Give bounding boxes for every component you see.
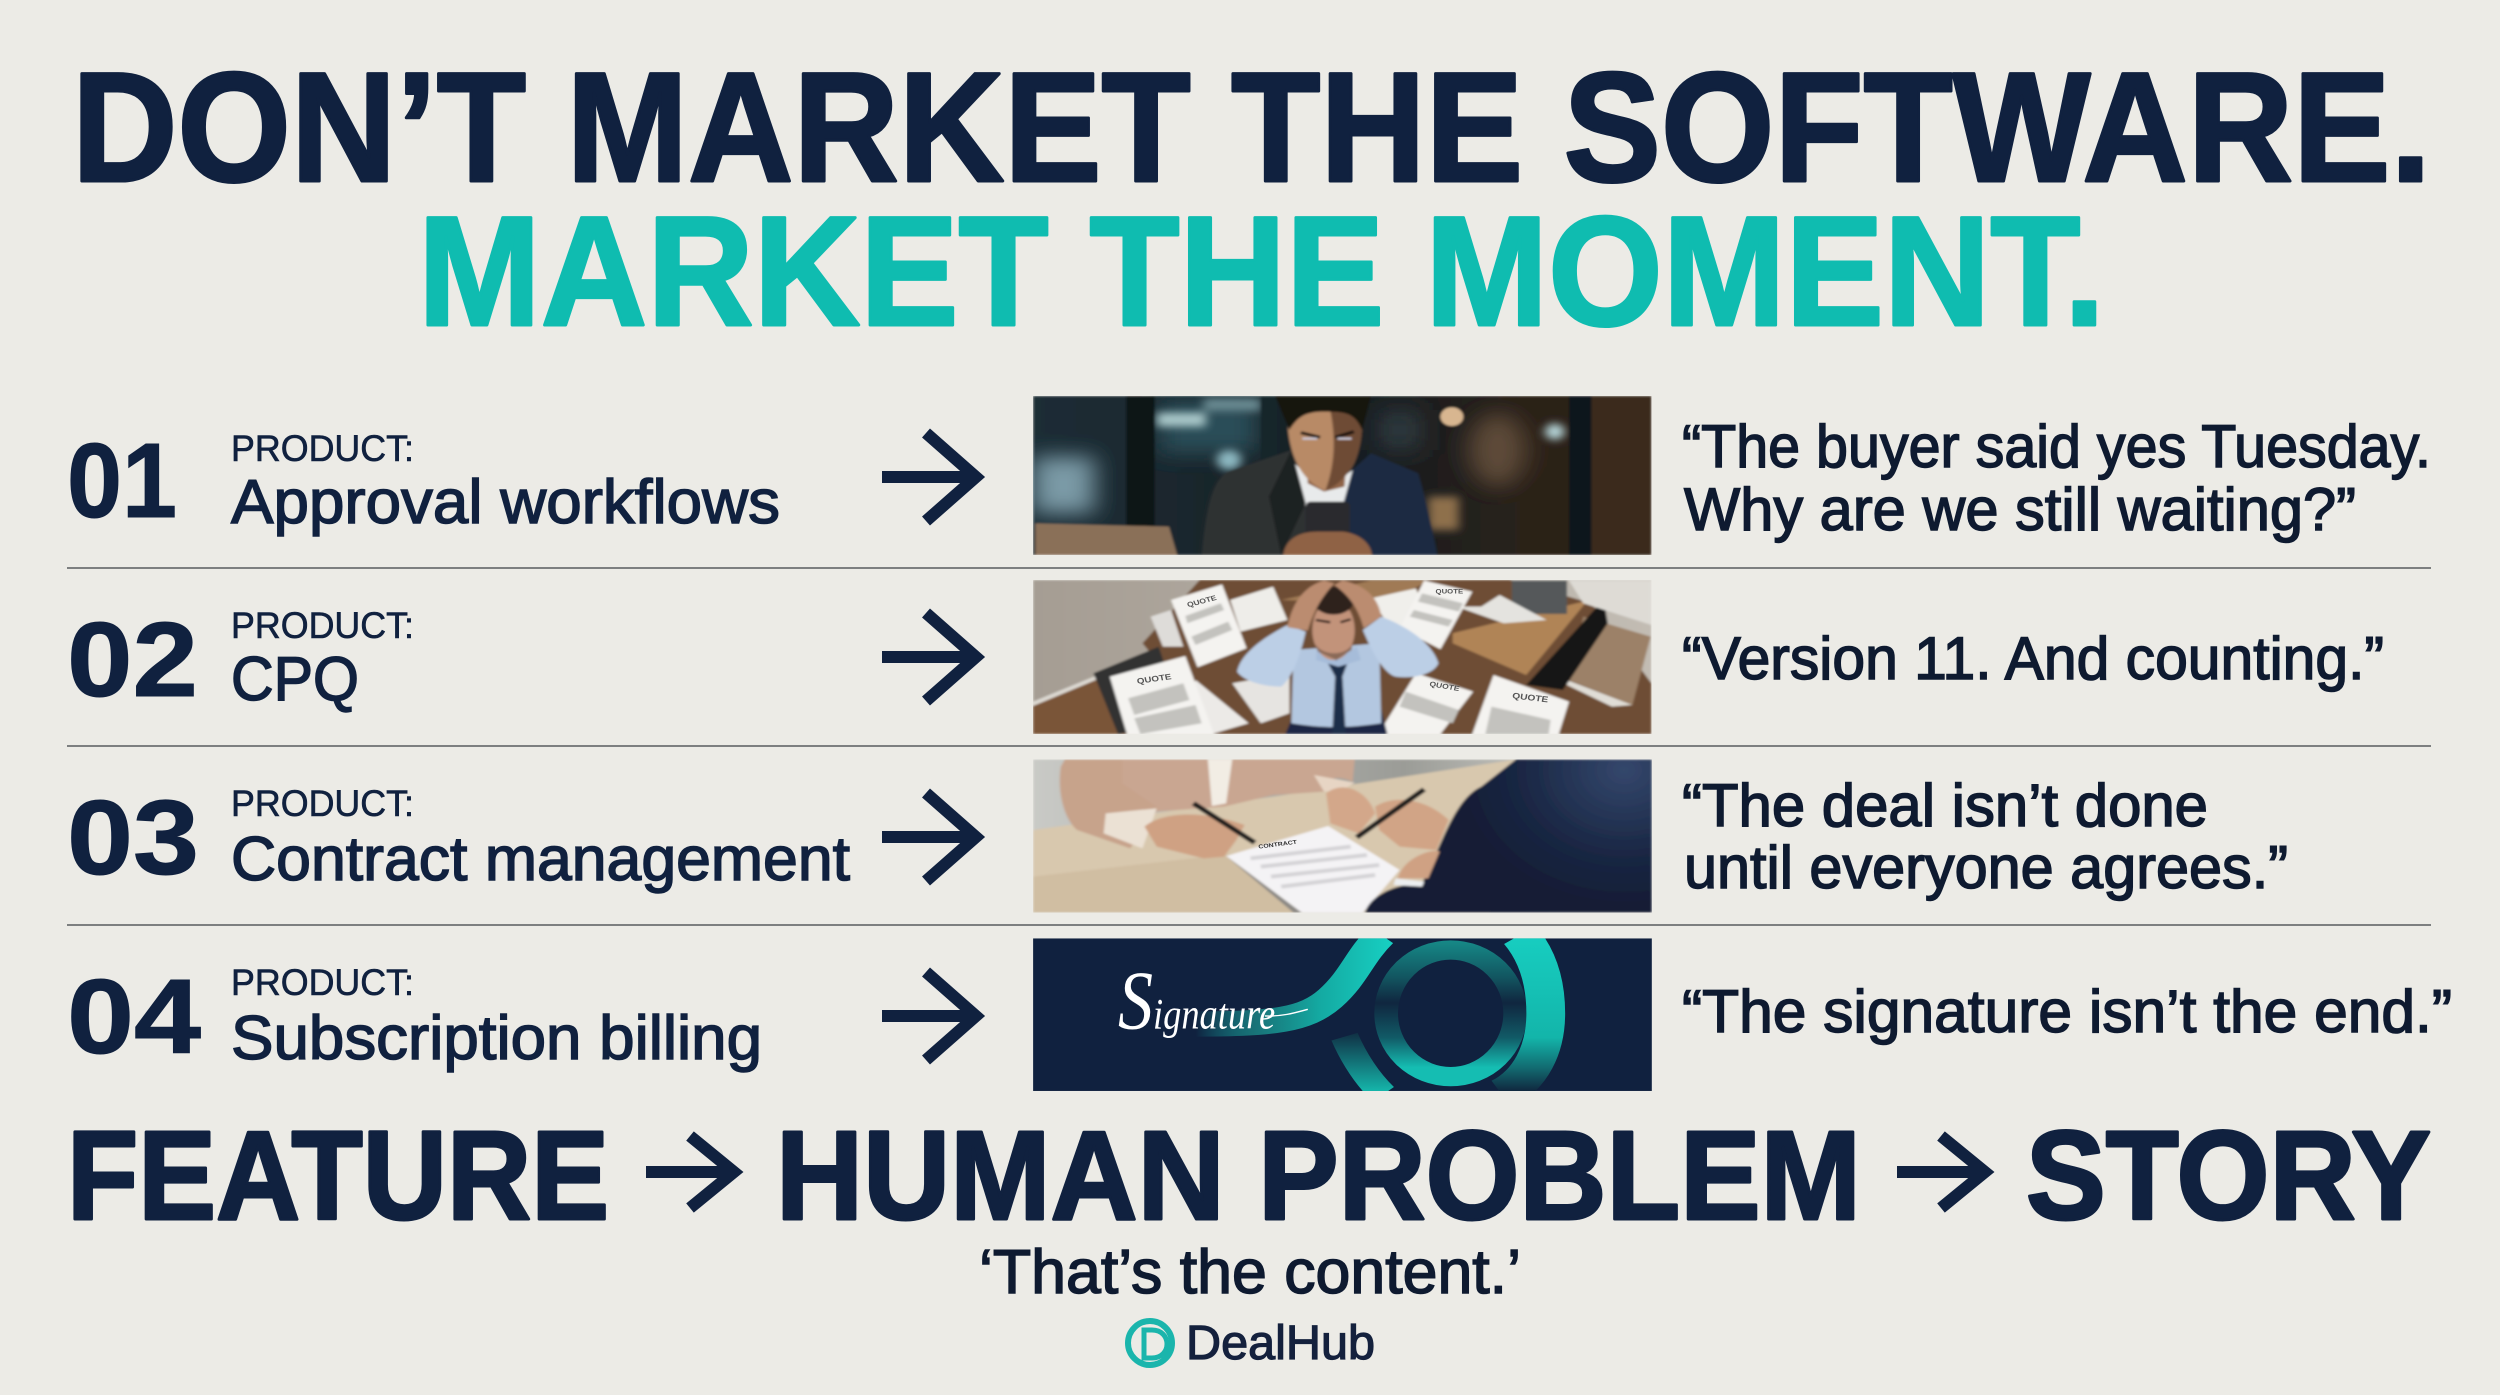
jacket (1202, 450, 1306, 555)
laptop (1036, 523, 1177, 555)
suit (1365, 759, 1652, 913)
doc labels: QUOTE (1436, 588, 1463, 595)
formula: feature to human problem to story: HUMAN PROBLEM (776, 1105, 1861, 1246)
product label 03: PRODUCT: (231, 783, 414, 824)
photo: contract signing: CONTRACT (1258, 839, 1298, 850)
arrow: human problem to story (1897, 1136, 1985, 1208)
man (1285, 710, 1387, 734)
product name 03: Contract management (231, 825, 850, 894)
row 04 (67, 935, 1652, 1094)
row 01 (67, 396, 1651, 555)
logo: DealHub: DealHub (1186, 1317, 1375, 1370)
arrow 01 (882, 433, 976, 521)
doc labels: QUOTE (1136, 672, 1172, 686)
number 01: 01 (67, 422, 177, 540)
arrow: feature to human problem (646, 1136, 734, 1208)
photo: stressed man among quotes (1033, 580, 1651, 734)
closing line: ‘That’s the content.’ (979, 1238, 1521, 1307)
quote 04: “The signature isn’t the end.” (1682, 978, 2452, 1045)
quote 03 (1682, 772, 2288, 901)
doc labels: QUOTE (1429, 680, 1460, 693)
inner ring (1386, 950, 1515, 1077)
phone (1306, 502, 1350, 535)
image: signature turning into teal loop (1033, 935, 1652, 1094)
left hand (1145, 814, 1245, 858)
logo mark (1128, 1321, 1172, 1365)
papers (1110, 581, 1569, 734)
hands (1283, 532, 1372, 555)
number 04: 04 (67, 958, 201, 1076)
product label 01: PRODUCT: (231, 428, 414, 469)
number 02: 02 (67, 601, 198, 719)
lower left strand (1345, 1037, 1383, 1094)
photo: contract signing (1033, 759, 1652, 913)
signature: Signature (1118, 955, 1275, 1047)
formula: feature to human problem to story: FEATURE (67, 1105, 609, 1246)
hands on head (1287, 581, 1334, 631)
doc labels: QUOTE (1512, 691, 1549, 704)
quote 01 (1682, 413, 2431, 543)
title line 2: MARKET THE MOMENT. (418, 185, 2105, 359)
center hand (1326, 787, 1375, 833)
row 03 (67, 759, 1652, 913)
quote 01: “The buyer said yes Tuesday. (1682, 413, 2431, 480)
product label 04: PRODUCT: (231, 962, 414, 1003)
head (1312, 600, 1355, 660)
neck and face (1306, 476, 1347, 493)
arrow 03 (882, 793, 976, 881)
product label 02: PRODUCT: (231, 605, 414, 646)
photo: man checking phone at night (1033, 396, 1651, 555)
right hand (1375, 800, 1449, 850)
product name 01: Approval workflows (231, 468, 780, 537)
arrow 04 (882, 972, 976, 1060)
blazer (1121, 760, 1356, 812)
quote 03: until everyone agrees.” (1684, 834, 2288, 901)
formula: feature to human problem to story (67, 1105, 2431, 1246)
outer right band (1502, 935, 1546, 1094)
arrow 02 (882, 613, 976, 701)
quote 02: “Version 11. And counting.” (1682, 625, 2384, 692)
product name 02: CPQ (231, 645, 359, 714)
formula: feature to human problem to story: STORY (2026, 1105, 2431, 1246)
product name 04: Subscription billing (231, 1004, 762, 1073)
ribbon from signature (1196, 935, 1381, 1024)
quote 03: “The deal isn’t done (1682, 772, 2208, 839)
contract (1226, 826, 1400, 913)
doc labels (1136, 588, 1549, 704)
doc labels: QUOTE (1186, 594, 1218, 609)
row 02 (67, 580, 1651, 734)
number 03: 03 (67, 779, 199, 897)
quote 01: Why are we still waiting?” (1684, 476, 2356, 543)
